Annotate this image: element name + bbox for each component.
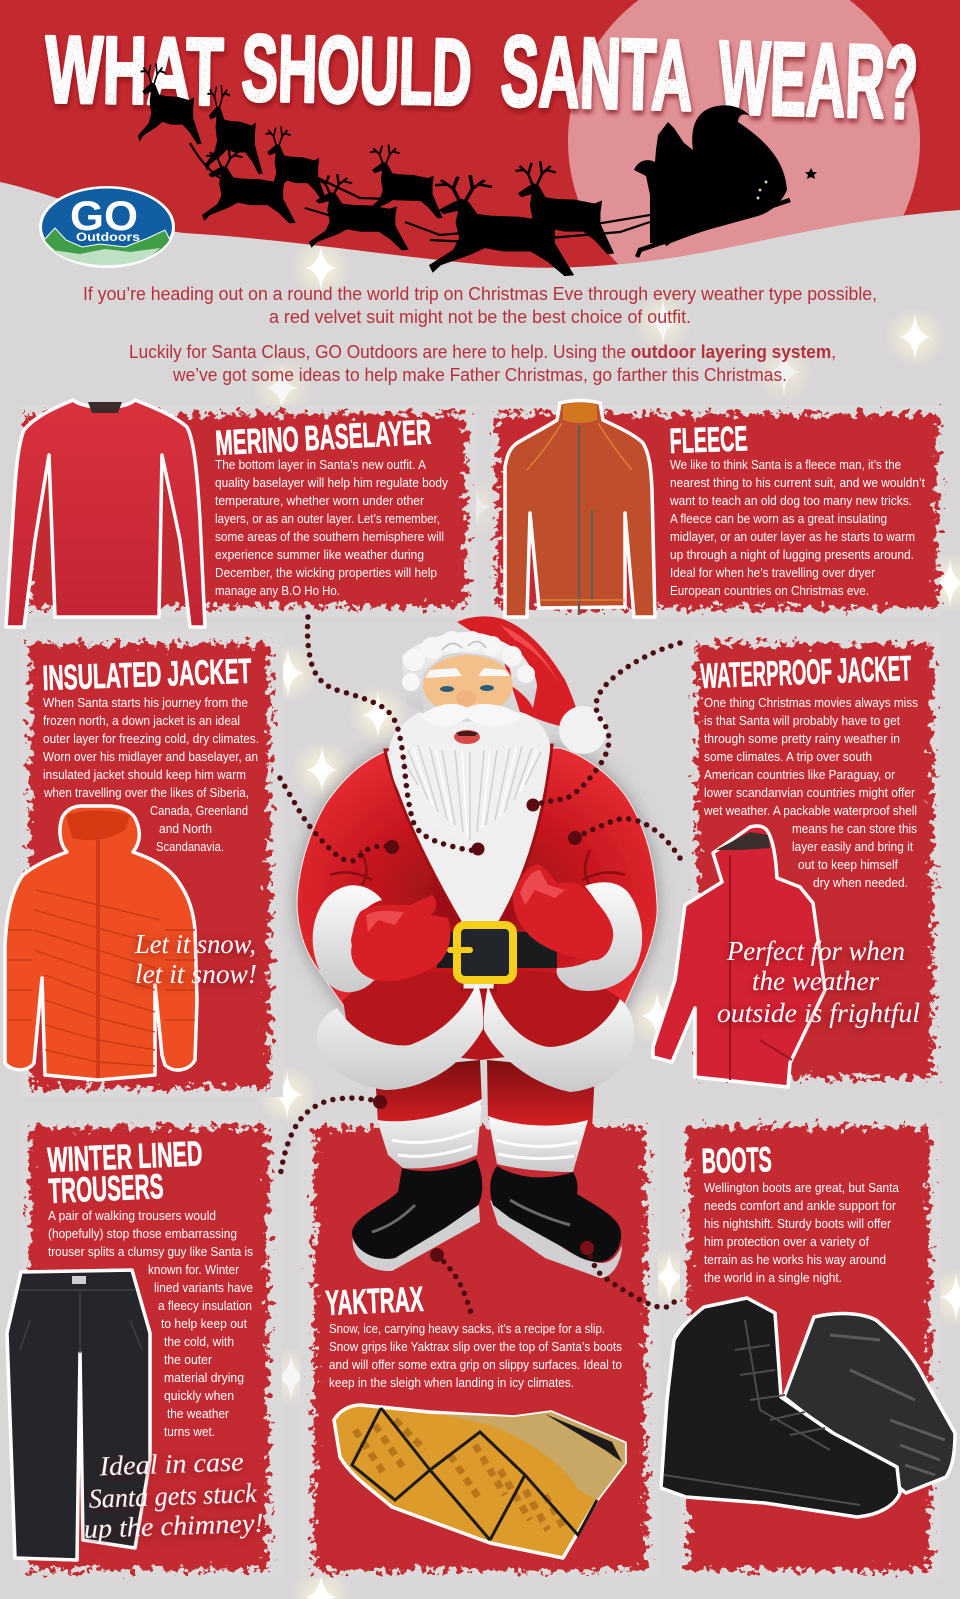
body text: lower scandanvian countries might offer — [704, 785, 916, 800]
title: WHAT — [45, 17, 224, 125]
callout: Ideal in case — [98, 1446, 244, 1481]
intro text: Luckily for Santa Claus, GO Outdoors are here to help. Using the outdoor layering system, — [129, 342, 836, 362]
body text: terrain as he works his way around — [704, 1252, 886, 1267]
sleigh — [634, 105, 787, 244]
dotted connectors — [280, 617, 680, 1313]
santa coat folds — [330, 850, 625, 885]
body text — [43, 695, 259, 854]
body text: turns wet. — [164, 1424, 215, 1439]
panel backgrounds — [28, 414, 938, 1570]
santa beard — [389, 712, 550, 846]
body text: the outer — [164, 1352, 213, 1367]
santa arm cuffs — [313, 882, 642, 992]
body text: We like to think Santa is a fleece man, it’s the — [670, 457, 901, 472]
santa hat fur band — [402, 631, 537, 713]
body text — [703, 695, 918, 890]
body text: his nightshift. Sturdy boots will offer — [704, 1216, 892, 1231]
panel: boots — [661, 1140, 955, 1517]
body text: experience summer like weather during — [215, 547, 424, 562]
panel: insulated jacket — [5, 652, 259, 1080]
body text: manage any B.O Ho Ho. — [215, 583, 340, 598]
callout — [81, 1446, 264, 1544]
panel: fleece — [505, 400, 925, 617]
icon: boot with yaktrax grips — [334, 1405, 625, 1558]
santa leg cuffs — [377, 1099, 588, 1172]
heading: INSULATED JACKET — [42, 652, 252, 698]
body text: Canada, Greenland — [150, 803, 248, 818]
callout: Santa gets stuck — [88, 1478, 258, 1514]
body text: outer layer for freezing cold, dry climates. — [43, 731, 259, 746]
body text: the world in a single night. — [704, 1270, 842, 1285]
callout: outside is frightful — [717, 998, 920, 1028]
moon — [568, 0, 920, 264]
panel: waterproof jacket — [653, 649, 920, 1087]
body text: wet weather. A packable waterproof shell — [703, 803, 917, 818]
body text — [48, 1208, 253, 1439]
body text: up through a night of lugging presents around. — [670, 547, 914, 562]
body text: out to keep himself — [798, 857, 898, 872]
santa legs — [375, 1060, 595, 1135]
callout: up the chimney! — [83, 1508, 264, 1544]
body text: some climates. A trip over south — [704, 749, 872, 764]
callout: let it snow! — [135, 959, 257, 989]
heading: MERINO BASELAYER — [214, 413, 432, 463]
header banner with moon — [0, 0, 960, 268]
body text: material drying — [164, 1370, 244, 1385]
santa hem right — [484, 986, 634, 1092]
body text: Ideal for when he’s travelling over dryer — [670, 565, 876, 580]
title — [45, 15, 919, 141]
body text: European countries on Christmas eve. — [670, 583, 869, 598]
santa white front — [385, 745, 552, 990]
title: SANTA — [499, 15, 694, 132]
santa mittens — [351, 865, 613, 981]
body text: layer easily and bring it — [792, 839, 913, 854]
body text: quickly when — [164, 1388, 234, 1403]
body text: The bottom layer in Santa’s new outfit. A — [215, 457, 426, 472]
body text: A fleece can be worn as a great insulating — [670, 511, 887, 526]
callout — [717, 936, 920, 1028]
body text: quality baselayer will help him regulate body — [215, 475, 448, 490]
body text: the weather — [167, 1406, 230, 1421]
body text: known for. Winter — [148, 1262, 240, 1277]
body text: Snow grips like Yaktrax slip over the top of Santa’s boots — [329, 1339, 622, 1354]
body text: Snow, ice, carrying heavy sacks, it’s a recipe for a slip. — [329, 1321, 605, 1336]
sleigh and reindeer silhouette — [138, 63, 817, 276]
santa belt and buckle — [437, 925, 557, 980]
intro text: If you’re heading out on a round the world trip on Christmas Eve through every weather type possible, — [83, 284, 877, 304]
body text: when travelling over the likes of Siberia, — [43, 785, 249, 800]
santa hem left — [317, 982, 483, 1090]
body text: A pair of walking trousers would — [48, 1208, 216, 1223]
panel: yaktrax — [325, 1280, 625, 1558]
body text: means he can store this — [792, 821, 917, 836]
santa hat — [457, 616, 607, 754]
logo: GO Outdoors — [39, 186, 175, 268]
body text: Worn over his midlayer and baselayer, an — [43, 749, 258, 764]
body text: and will offer some extra grip on slippy surfaces. Ideal to — [329, 1357, 622, 1372]
heading: WINTER LINED — [47, 1134, 203, 1180]
body text: is that Santa will probably have to get — [704, 713, 900, 728]
body text: want to teach an old dog too many new tricks. — [669, 493, 912, 508]
body text: through some pretty rainy weather in — [704, 731, 900, 746]
body text: some areas of the southern hemisphere will — [215, 529, 444, 544]
icon: pair of black boots — [661, 1298, 955, 1517]
santa lower coat — [343, 971, 622, 1060]
sparkles — [252, 238, 960, 1599]
heading: TROUSERS — [48, 1167, 164, 1211]
panel: merino baselayer — [6, 400, 448, 627]
body text: the cold, with — [164, 1334, 234, 1349]
body text: December, the wicking properties will help — [215, 565, 437, 580]
body text: Scandanavia. — [156, 839, 224, 854]
body text: insulated jacket should keep him warm — [43, 767, 246, 782]
body text: lined variants have — [154, 1280, 253, 1295]
logo: GO Outdoors: GO — [70, 192, 138, 239]
icon: orange fleece pullover — [505, 400, 655, 617]
body text — [669, 457, 925, 598]
heading: YAKTRAX — [325, 1280, 425, 1323]
body text: layers, or as an outer layer. Let’s remember, — [215, 511, 440, 526]
illustration: santa — [297, 616, 657, 1278]
body text: midlayer, or an outer layer as he starts to warm — [670, 529, 915, 544]
faint panel boxes — [21, 405, 940, 1578]
intro text: a red velvet suit might not be the best choice of outfit. — [269, 307, 691, 327]
body text: (hopefully) stop those embarrassing — [48, 1226, 237, 1241]
body text: American countries like Paraguay, or — [704, 767, 896, 782]
body text: nearest thing to his current suit, and we wouldn’t — [670, 475, 925, 490]
panel: winter lined trousers — [7, 1134, 264, 1560]
icon: orange down jacket — [5, 806, 197, 1080]
body text: to help keep out — [161, 1316, 247, 1331]
intro text: we’ve got some ideas to help make Father Christmas, go farther this Christmas. — [172, 365, 787, 385]
icon: black walking trousers — [7, 1270, 150, 1560]
heading: BOOTS — [701, 1140, 772, 1181]
title: SHOULD — [241, 15, 473, 125]
body text — [704, 1180, 900, 1285]
heading — [47, 1134, 203, 1211]
body text: frozen north, a down jacket is an ideal — [43, 713, 240, 728]
santa boots — [352, 1159, 622, 1278]
callout: Let it snow, — [134, 929, 256, 959]
body text: needs comfort and ankle support for — [704, 1198, 897, 1213]
callout: Perfect for when — [726, 936, 905, 966]
body text: a fleecy insulation — [158, 1298, 252, 1313]
body text: trouser splits a clumsy guy like Santa is — [48, 1244, 253, 1259]
logo: GO Outdoors: Outdoors — [76, 230, 140, 244]
santa body — [297, 748, 657, 1015]
body text: and North — [159, 821, 212, 836]
heading: FLEECE — [669, 419, 748, 461]
body text: Wellington boots are great, but Santa — [704, 1180, 900, 1195]
body text — [329, 1321, 622, 1390]
callout — [134, 929, 257, 989]
callout: the weather — [752, 966, 879, 996]
body text: keep in the sleigh when landing in icy climates. — [329, 1375, 574, 1390]
icon: red long-sleeve baselayer — [6, 400, 205, 627]
body text: temperature, whether worn under other — [215, 493, 425, 508]
body text — [215, 457, 448, 598]
body text: One thing Christmas movies always miss — [704, 695, 918, 710]
santa face — [423, 655, 513, 715]
santa mouth — [454, 730, 480, 744]
body text: him protection over a variety of — [704, 1234, 869, 1249]
santa moustache and brows — [420, 668, 523, 726]
body text: dry when needed. — [813, 875, 908, 890]
santa eyes and nose — [440, 685, 494, 706]
intro text — [83, 284, 877, 385]
icon: red waterproof jacket — [653, 826, 825, 1087]
body text: When Santa starts his journey from the — [43, 695, 248, 710]
